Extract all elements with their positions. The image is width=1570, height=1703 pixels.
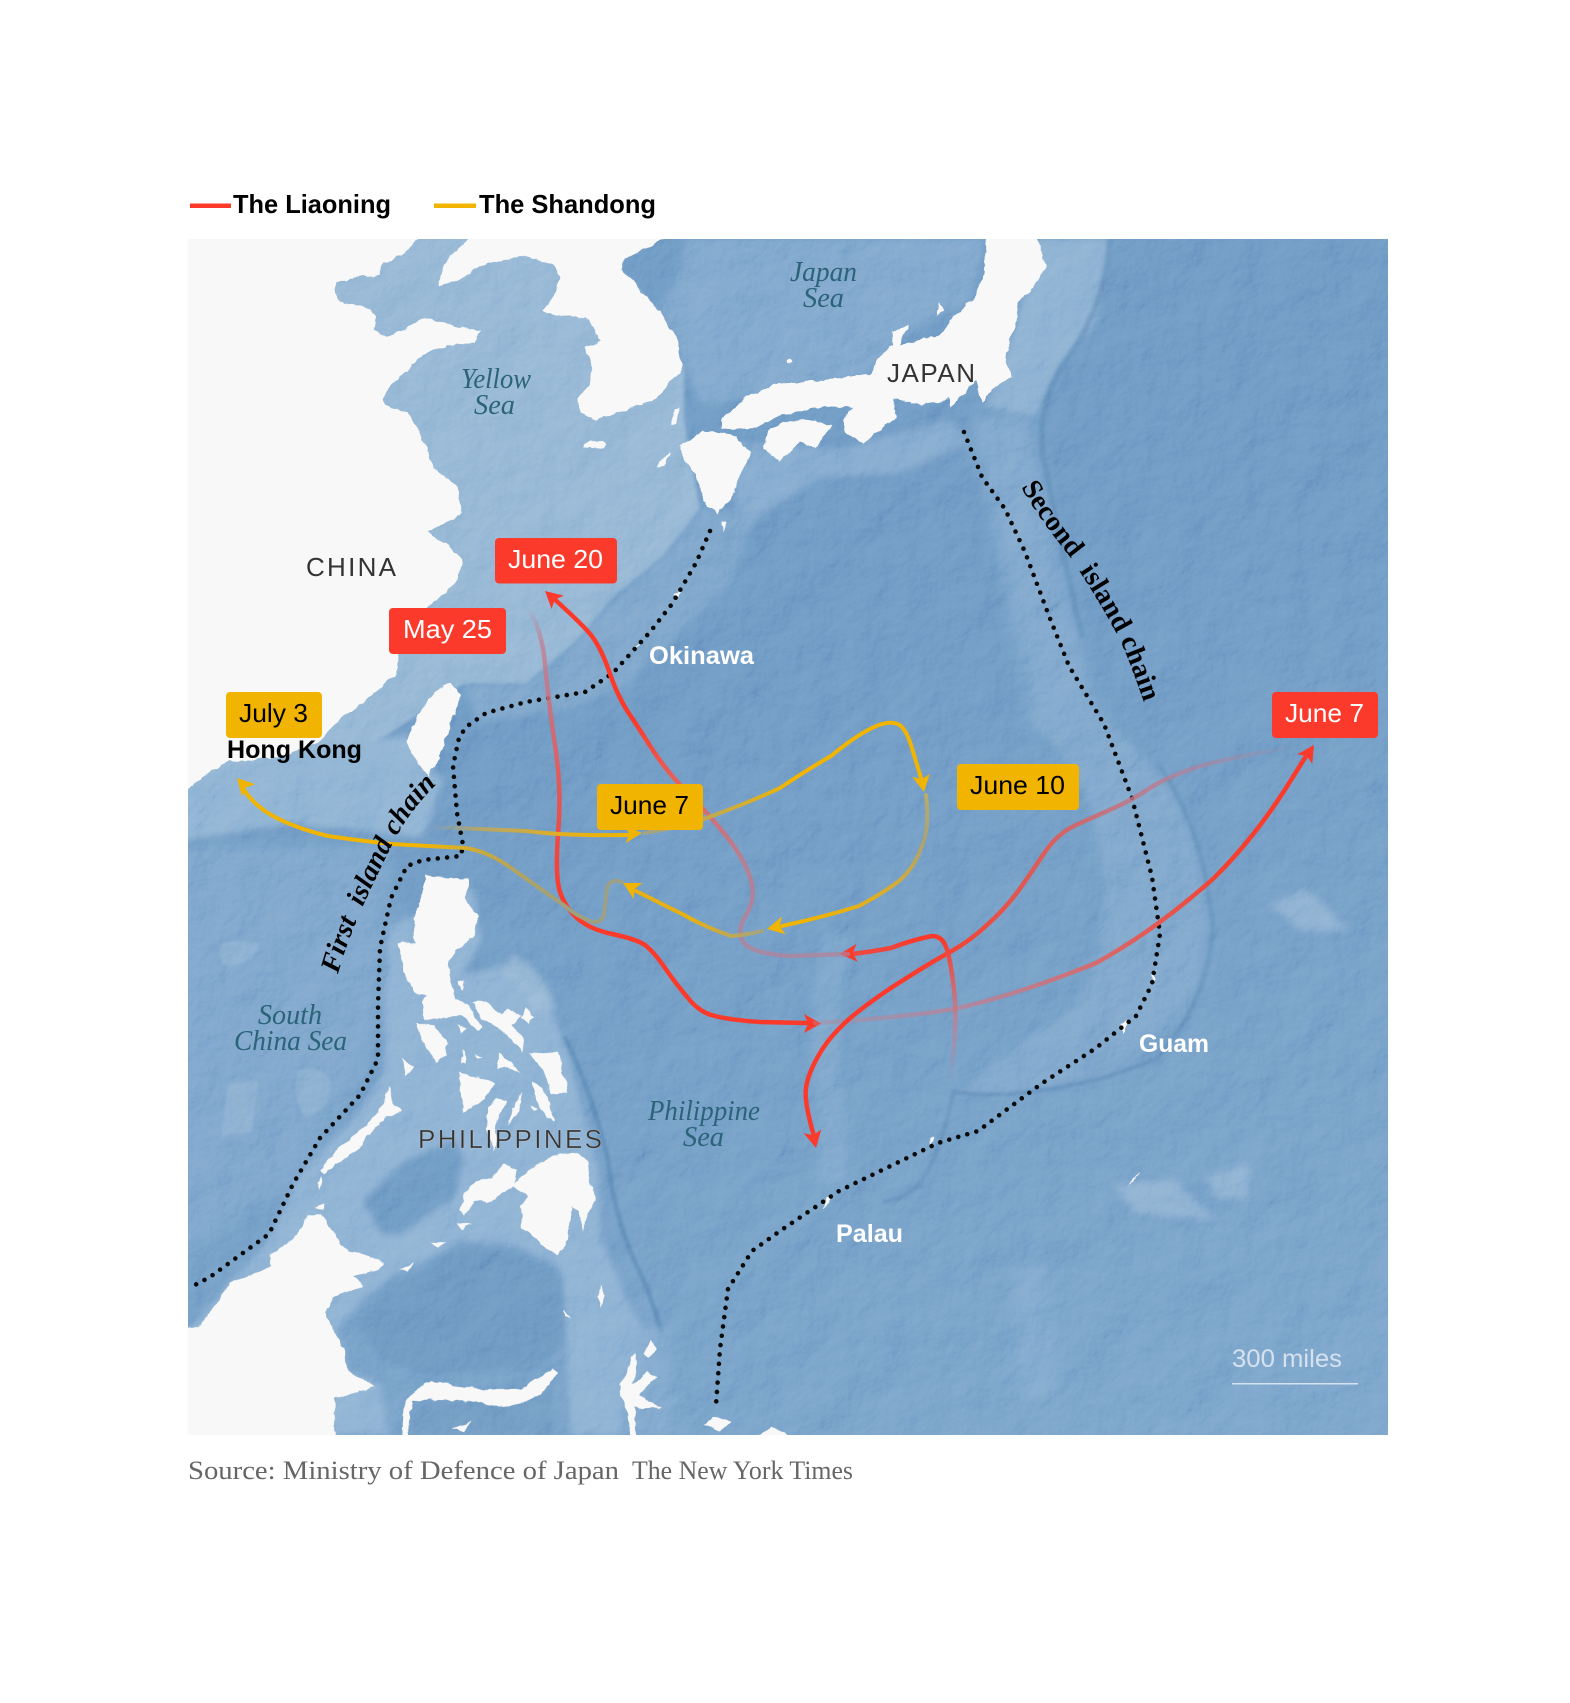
date tag: June 7 Shandong bbox=[597, 784, 703, 830]
date tag: June 7 Liaoning bbox=[1272, 692, 1378, 738]
date tag: July 3: July 3 bbox=[239, 698, 308, 728]
date tag: June 10: June 10 bbox=[970, 770, 1065, 800]
country labels bbox=[306, 358, 975, 1154]
sea labels: Yellow bbox=[461, 364, 531, 395]
date tag: June 20 bbox=[495, 538, 617, 584]
bathymetry bbox=[162, 224, 1349, 1435]
island labels: Okinawa bbox=[649, 642, 755, 670]
first island chain dotted line bbox=[193, 531, 710, 1286]
sea labels: Sea bbox=[803, 283, 844, 314]
date tag: June 7 Liaoning: June 7 bbox=[1285, 698, 1364, 728]
legend bbox=[190, 189, 656, 219]
island labels: Guam bbox=[1139, 1030, 1209, 1058]
date tag: July 3 bbox=[226, 692, 322, 738]
scale bar bbox=[1232, 1345, 1358, 1384]
sea labels: Philippine bbox=[647, 1096, 760, 1127]
place label: Hong Kong: Hong Kong bbox=[227, 736, 362, 764]
sea labels: Japan bbox=[790, 257, 857, 288]
source line: The New York Times bbox=[632, 1456, 853, 1485]
sea labels: China Sea bbox=[234, 1026, 347, 1057]
island labels: Palau bbox=[836, 1220, 903, 1248]
date tag: May 25: May 25 bbox=[403, 614, 492, 644]
legend: The Shandong bbox=[479, 189, 656, 219]
country labels: JAPAN bbox=[887, 358, 975, 388]
route: Shandong bbox=[230, 723, 933, 938]
island labels bbox=[649, 642, 1209, 1248]
source line bbox=[188, 1456, 853, 1485]
scale bar: 300 miles bbox=[1232, 1345, 1342, 1373]
second island chain dotted line bbox=[716, 432, 1160, 1405]
country labels: PHILIPPINES bbox=[418, 1124, 602, 1154]
sea labels: Sea bbox=[474, 390, 515, 421]
date tag: June 10 bbox=[957, 764, 1079, 810]
sea labels bbox=[234, 257, 857, 1153]
seafloor relief texture bbox=[188, 239, 1388, 1435]
date tag: June 20: June 20 bbox=[508, 544, 603, 574]
source line: Source: Ministry of Defence of Japan bbox=[188, 1456, 619, 1485]
sea labels: Sea bbox=[683, 1122, 724, 1153]
first island chain label: First island chain bbox=[321, 776, 436, 974]
date tag: May 25 bbox=[389, 608, 506, 654]
legend: The Liaoning bbox=[233, 189, 391, 219]
date tag: June 7 Shandong: June 7 bbox=[610, 790, 689, 820]
route: Liaoning bbox=[528, 584, 1322, 1150]
second island chain label: Second island chain bbox=[1022, 480, 1156, 702]
South China Sea features are drawn as soft patches bbox=[220, 941, 331, 1135]
sea labels: South bbox=[258, 1000, 322, 1031]
country labels: CHINA bbox=[306, 552, 397, 582]
land masses bbox=[162, 220, 1156, 1459]
map panel bbox=[188, 239, 1388, 1435]
